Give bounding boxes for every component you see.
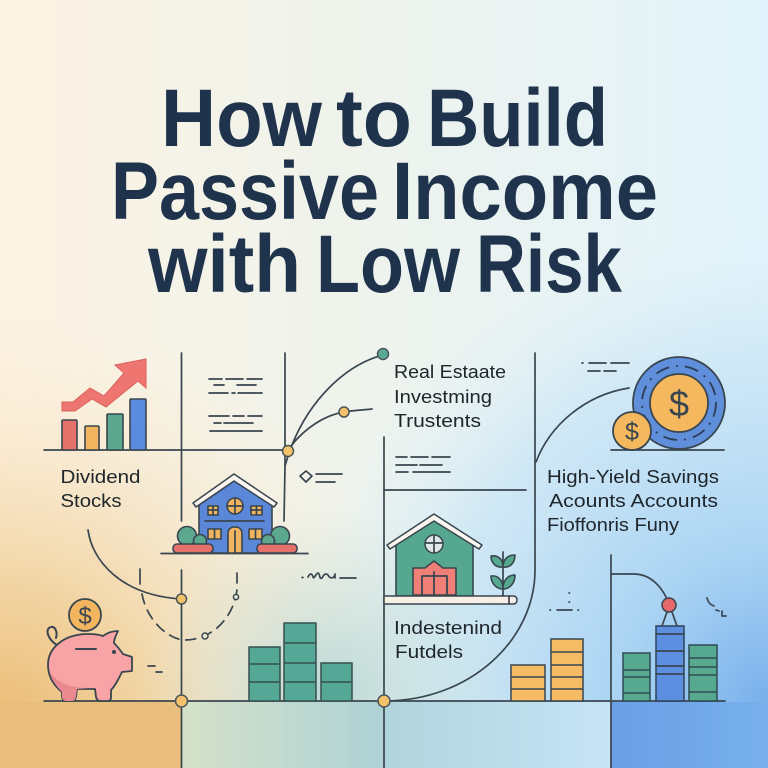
small marks by piggy bbox=[148, 666, 162, 672]
grid and connector lines bbox=[44, 353, 725, 768]
dashed arc bbox=[140, 569, 239, 640]
label: Dividend Stocks bbox=[60, 467, 140, 511]
title: Income bbox=[392, 146, 658, 237]
title: How bbox=[161, 73, 322, 164]
title: Risk bbox=[476, 219, 622, 310]
icon: coins: $ bbox=[625, 418, 639, 446]
note lines near chart bbox=[209, 379, 262, 431]
title: with bbox=[147, 219, 301, 310]
label: Indestenind Futdels bbox=[394, 618, 502, 662]
label: Real Estate Investming Trustents: Investming bbox=[394, 387, 492, 407]
handwritten mark bbox=[302, 573, 356, 578]
label: Indestenind Futdels: Indestenind bbox=[394, 618, 502, 638]
icon: coins: $ bbox=[669, 383, 689, 424]
title: Low bbox=[316, 219, 460, 310]
title bbox=[111, 73, 658, 310]
label: Dividend Stocks: Dividend bbox=[60, 467, 140, 487]
label: Real Estate Investming Trustents bbox=[394, 362, 506, 431]
label: Real Estate Investming Trustents: Trustents bbox=[394, 411, 481, 431]
green stacked bars bbox=[249, 623, 352, 701]
title: to bbox=[336, 73, 412, 164]
label: High-Yield Savings Acounts Accounts Fioffonris Funy: High-Yield Savings bbox=[547, 467, 719, 487]
connector nodes bbox=[176, 348, 390, 707]
icon: green house on platform bbox=[384, 514, 517, 604]
blue and green stacked bars with pin bbox=[623, 598, 717, 701]
icon: piggy bank with coin: $ bbox=[78, 603, 92, 630]
label: High-Yield Savings Acounts Accounts Fioffonris Funy: Acounts Accounts bbox=[549, 491, 718, 511]
label: High-Yield Savings Acounts Accounts Fioffonris Funy bbox=[547, 467, 719, 535]
diamond note bbox=[300, 471, 342, 482]
note lines above coins bbox=[582, 363, 629, 371]
label: Indestenind Futdels: Futdels bbox=[395, 642, 463, 662]
orange stacked bars bbox=[511, 639, 583, 701]
label: Dividend Stocks: Stocks bbox=[60, 491, 122, 511]
label: Real Estate Investming Trustents: Real Estaate bbox=[394, 362, 506, 382]
title: Passive bbox=[111, 146, 379, 237]
icon: coins bbox=[611, 357, 725, 450]
title: Build bbox=[427, 73, 608, 164]
small squiggle mark bbox=[707, 598, 726, 616]
icon: bar chart with rising arrow bbox=[62, 359, 146, 450]
icon: piggy bank with coin bbox=[48, 599, 132, 701]
label: High-Yield Savings Acounts Accounts Fioffonris Funy: Fioffonris Funy bbox=[547, 515, 679, 535]
small marks above orange bars bbox=[550, 593, 578, 610]
icon: blue house bbox=[161, 474, 308, 554]
note lines under real estate label bbox=[396, 457, 450, 472]
